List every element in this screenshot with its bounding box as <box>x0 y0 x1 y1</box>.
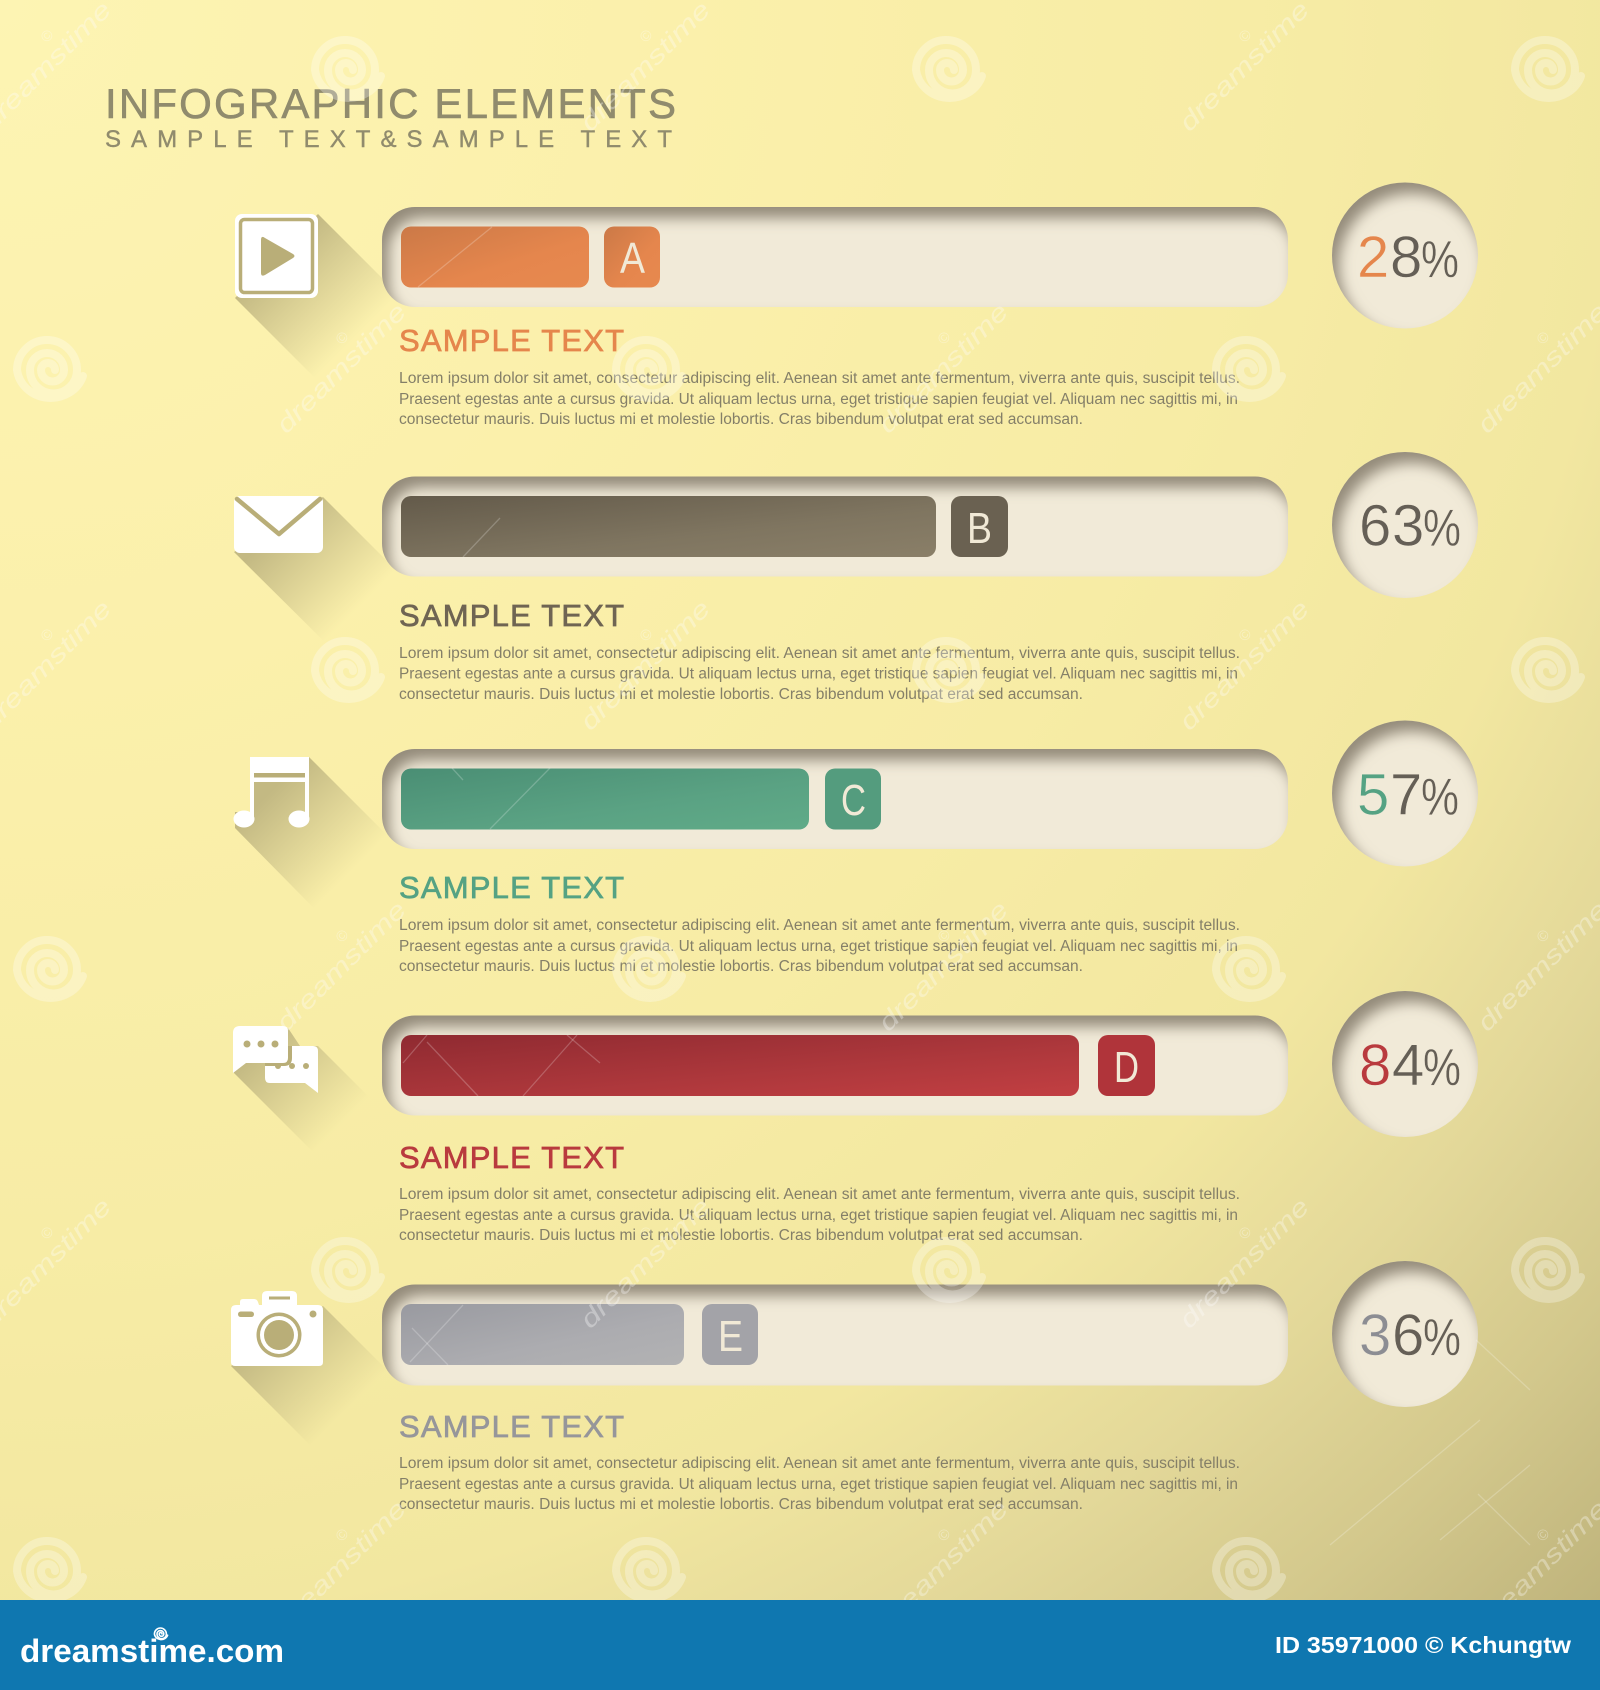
footer credit: ID 35971000 © Kchungtw <box>1275 1632 1571 1658</box>
percent circle 28%: 8 <box>1390 225 1422 290</box>
badge D: D <box>1114 1043 1139 1092</box>
body text A: consectetur mauris. Duis luctus mi et molestie lobortis. Cras bibendum volutpat erat sed accumsan. <box>399 411 1083 428</box>
row C <box>234 720 1478 975</box>
watermark text: dreamstime <box>271 896 412 1037</box>
bar B <box>401 496 936 557</box>
footer band <box>0 1600 1600 1690</box>
percent circle 63% <box>1332 452 1478 598</box>
percent circle 63%: % <box>1423 500 1461 558</box>
heading C: SAMPLE TEXT <box>399 870 624 905</box>
percent circle 28% <box>1332 182 1478 328</box>
watermark text: dreamstime <box>1174 1193 1315 1334</box>
watermark text: © <box>1235 1223 1255 1243</box>
watermark text: © <box>37 26 57 46</box>
watermark text: © <box>37 1223 57 1243</box>
watermark text: © <box>934 1525 954 1545</box>
body text B: Lorem ipsum dolor sit amet, consectetur adipiscing elit. Aenean sit amet ante fermentum, viverra ante quis, suscipit tellus. <box>399 645 1240 662</box>
badge C <box>825 768 881 830</box>
body text D: consectetur mauris. Duis luctus mi et molestie lobortis. Cras bibendum volutpat erat sed accumsan. <box>399 1227 1083 1244</box>
body text C: Lorem ipsum dolor sit amet, consectetur adipiscing elit. Aenean sit amet ante fermentum, viverra ante quis, suscipit tellus. <box>399 917 1240 934</box>
watermark text: dreamstime <box>873 896 1014 1037</box>
body text D: Lorem ipsum dolor sit amet, consectetur adipiscing elit. Aenean sit amet ante fermentum, viverra ante quis, suscipit tellus. <box>399 1186 1240 1203</box>
bar E <box>401 1304 684 1365</box>
badge D <box>1098 1035 1155 1096</box>
icon: music note with long shadow <box>234 757 431 945</box>
percent circle 28%: % <box>1421 231 1459 289</box>
body text A: Lorem ipsum dolor sit amet, consectetur adipiscing elit. Aenean sit amet ante fermentum, viverra ante quis, suscipit tellus. <box>399 370 1240 387</box>
watermark text: © <box>1533 1525 1553 1545</box>
body text B: Praesent egestas ante a cursus gravida. Ut aliquam lectus urna, eget tristique sapien feugiat vel. Aliquam nec sagittis mi, in <box>399 666 1238 682</box>
watermark text: dreamstime <box>575 1193 716 1334</box>
percent circle 36%: % <box>1423 1309 1461 1367</box>
badge A <box>604 226 660 288</box>
percent circle 57%: 7 <box>1390 762 1422 828</box>
watermark text: © <box>332 328 352 348</box>
percent circle 84%: % <box>1423 1039 1461 1097</box>
percent circle 57%: 5 <box>1357 762 1389 828</box>
body text E <box>399 1455 1240 1513</box>
body text E: Lorem ipsum dolor sit amet, consectetur adipiscing elit. Aenean sit amet ante fermentum, viverra ante quis, suscipit tellus. <box>399 1455 1240 1472</box>
heading D: SAMPLE TEXT <box>399 1140 624 1175</box>
row E <box>231 1261 1478 1513</box>
body text D <box>399 1186 1240 1244</box>
watermark text: © <box>332 926 352 946</box>
icon: envelope with long shadow <box>234 496 445 675</box>
watermark text: © <box>636 26 656 46</box>
percent circle 57%: % <box>1421 768 1459 826</box>
watermark text: © <box>37 625 57 645</box>
percent circle 84% <box>1332 991 1478 1137</box>
body text B <box>399 645 1240 703</box>
body text D: Praesent egestas ante a cursus gravida. Ut aliquam lectus urna, eget tristique sapien feugiat vel. Aliquam nec sagittis mi, in <box>399 1207 1238 1224</box>
watermark text: dreamstime <box>1472 896 1600 1037</box>
badge B: B <box>967 504 992 553</box>
percent circle 36%: 6 <box>1392 1303 1424 1368</box>
watermark text: dreamstime <box>575 0 716 137</box>
watermark text: dreamstime <box>1472 1495 1600 1636</box>
watermark text: © <box>1533 926 1553 946</box>
watermark text: © <box>636 625 656 645</box>
heading B: SAMPLE TEXT <box>399 598 624 633</box>
badge E: E <box>718 1312 743 1361</box>
icon: chat bubbles with long shadow <box>233 1026 440 1197</box>
body text A <box>399 370 1240 428</box>
percent circle 63%: 6 <box>1359 494 1391 558</box>
watermark text: © <box>1533 328 1553 348</box>
footer logo: dreamstime.com <box>20 1633 284 1669</box>
watermark text: dreamstime <box>873 1495 1014 1636</box>
percent circle 84%: 8 <box>1359 1033 1391 1098</box>
percent circle 36%: 3 <box>1359 1303 1391 1368</box>
body text C: consectetur mauris. Duis luctus mi et molestie lobortis. Cras bibendum volutpat erat sed accumsan. <box>399 958 1083 975</box>
watermark text: © <box>636 1223 656 1243</box>
watermark text: © <box>1235 625 1255 645</box>
progress track C <box>382 749 1288 849</box>
watermark text: dreamstime <box>575 595 716 736</box>
watermark text: © <box>332 1525 352 1545</box>
title block <box>105 80 676 153</box>
body text A: Praesent egestas ante a cursus gravida. Ut aliquam lectus urna, eget tristique sapien feugiat vel. Aliquam nec sagittis mi, in <box>399 391 1238 408</box>
progress track E <box>382 1284 1288 1386</box>
icon: camera with long shadow <box>231 1291 445 1489</box>
row A <box>235 182 1478 428</box>
badge E <box>702 1304 758 1365</box>
watermark text: dreamstime <box>1174 595 1315 736</box>
watermark text: © <box>934 926 954 946</box>
badge A: A <box>620 234 646 283</box>
watermark text: dreamstime <box>271 1495 412 1636</box>
progress track D <box>382 1016 1288 1116</box>
heading: INFOGRAPHIC ELEMENTS <box>105 80 676 127</box>
row B <box>234 452 1478 703</box>
bar A <box>401 226 589 288</box>
body text C <box>399 917 1240 975</box>
progress track B <box>382 476 1288 576</box>
watermark text: © <box>934 328 954 348</box>
percent circle 63%: 3 <box>1392 494 1424 558</box>
body text C: Praesent egestas ante a cursus gravida. Ut aliquam lectus urna, eget tristique sapien feugiat vel. Aliquam nec sagittis mi, in <box>399 938 1238 955</box>
watermark text: © <box>1235 26 1255 46</box>
watermark text: dreamstime <box>271 298 412 439</box>
watermark text: dreamstime <box>1472 298 1600 439</box>
heading E: SAMPLE TEXT <box>399 1409 624 1444</box>
body text E: consectetur mauris. Duis luctus mi et molestie lobortis. Cras bibendum volutpat erat sed accumsan. <box>399 1496 1083 1513</box>
percent circle 84%: 4 <box>1392 1033 1424 1098</box>
badge C: C <box>841 776 866 825</box>
watermark text: dreamstime <box>873 298 1014 439</box>
badge B <box>951 496 1008 557</box>
bar C <box>401 768 809 830</box>
watermark text: dreamstime <box>1174 0 1315 137</box>
heading A: SAMPLE TEXT <box>399 323 624 358</box>
percent circle 28%: 2 <box>1357 225 1389 290</box>
row D <box>233 991 1478 1244</box>
bar D <box>401 1035 1079 1096</box>
percent circle 57% <box>1332 720 1478 866</box>
percent circle 36% <box>1332 1261 1478 1407</box>
icon: play button with long shadow <box>235 214 440 420</box>
body text E: Praesent egestas ante a cursus gravida. Ut aliquam lectus urna, eget tristique sapien feugiat vel. Aliquam nec sagittis mi, in <box>399 1476 1238 1493</box>
subheading: SAMPLE TEXT&SAMPLE TEXT <box>105 126 672 153</box>
body text B: consectetur mauris. Duis luctus mi et molestie lobortis. Cras bibendum volutpat erat sed accumsan. <box>399 686 1083 703</box>
progress track A <box>382 207 1288 307</box>
